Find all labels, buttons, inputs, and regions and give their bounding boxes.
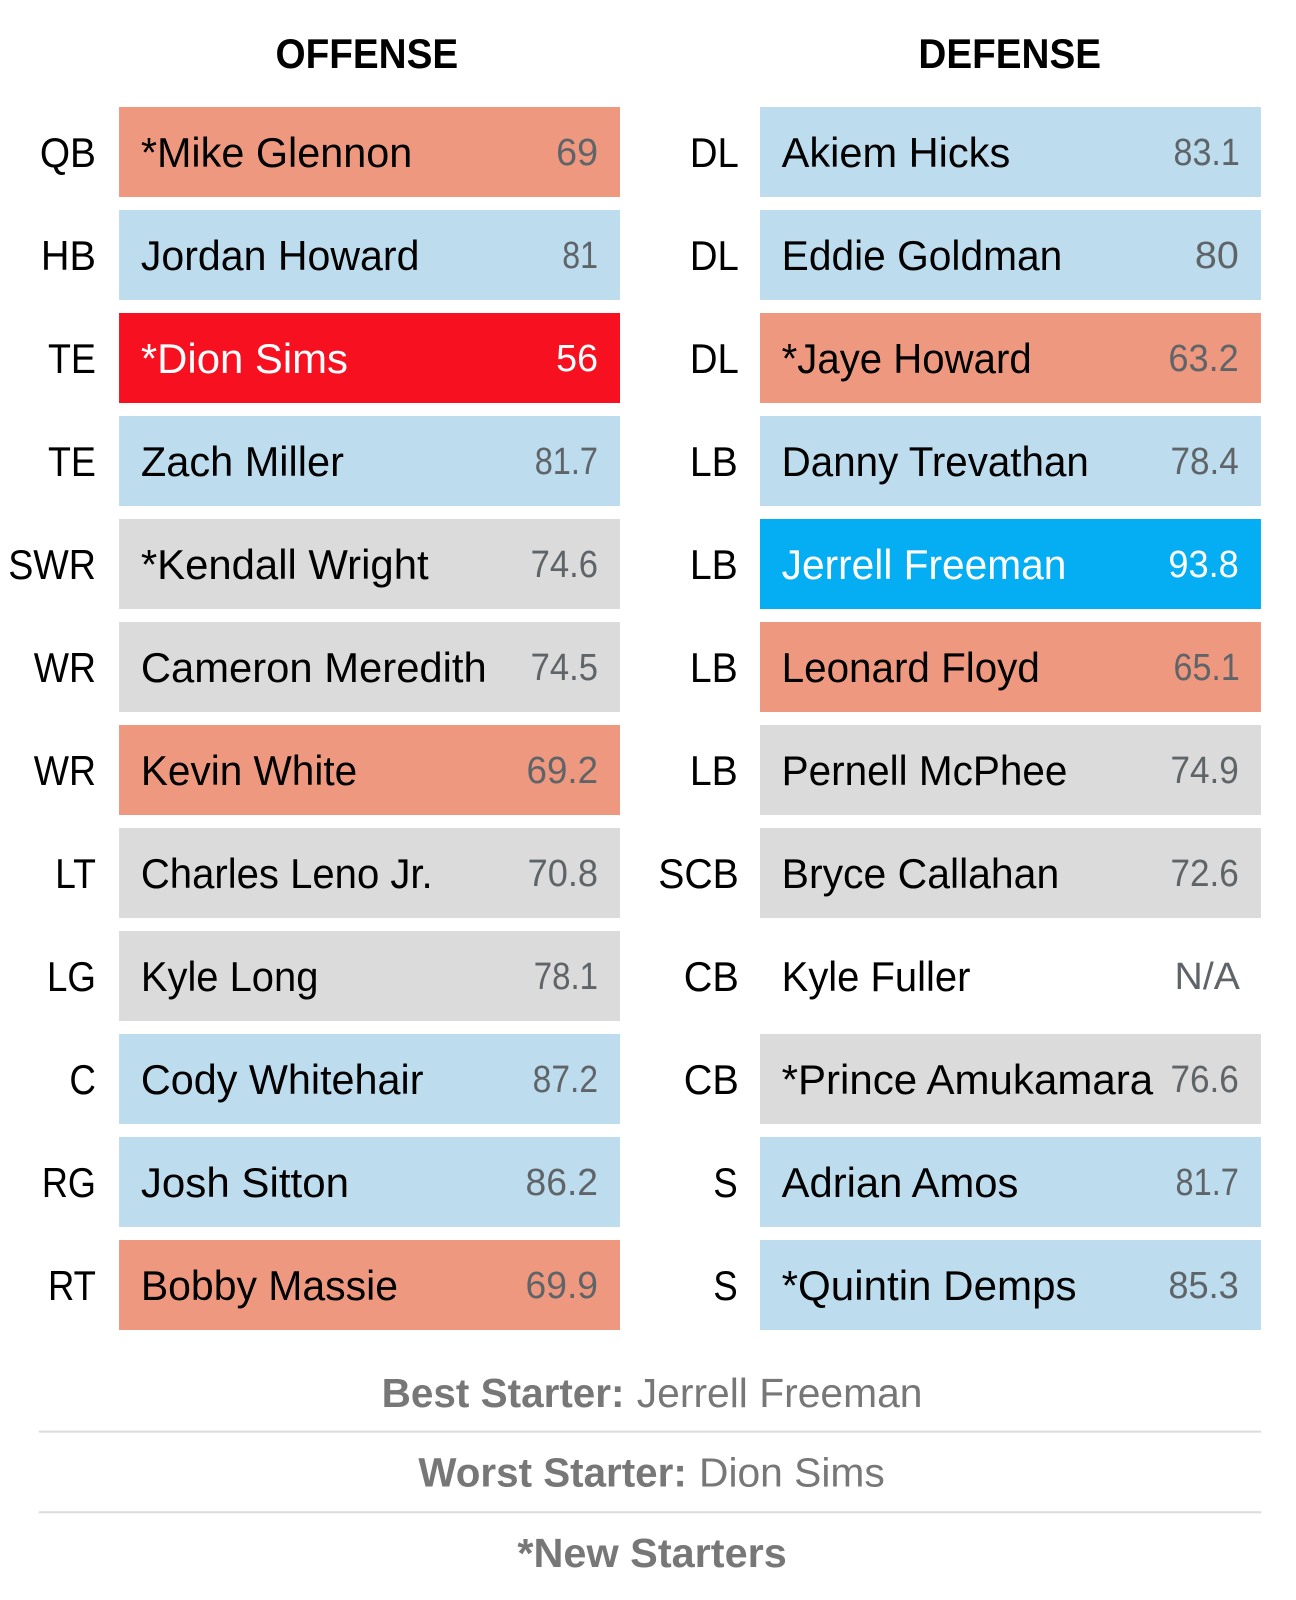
- row: TE Zach Miller: Zach Miller: [141, 438, 344, 485]
- text: best starter: Jerrell Freeman: [637, 1370, 922, 1416]
- text: worst starter: Dion Sims: [699, 1450, 885, 1496]
- row: LB Pernell McPhee: LB: [690, 747, 738, 794]
- row: LB Pernell McPhee: Pernell McPhee: [782, 747, 1067, 794]
- row: LT Charles Leno Jr.: 70.8: [528, 852, 598, 895]
- row: TE Dion Sims: TE: [48, 335, 96, 382]
- row: WR Cameron Meredith: 74.5: [531, 646, 598, 689]
- row: S Adrian Amos: S: [713, 1159, 738, 1206]
- row: LB Leonard Floyd: [690, 622, 1261, 712]
- row: DL Akiem Hicks: DL: [690, 129, 739, 176]
- row: WR Cameron Meredith: WR: [34, 644, 96, 691]
- row: LT Charles Leno Jr.: LT: [55, 850, 96, 897]
- row: HB Jordan Howard: Jordan Howard: [141, 232, 419, 279]
- row: TE Dion Sims: *Dion Sims: [141, 335, 348, 382]
- row: HB Jordan Howard: [41, 210, 620, 300]
- row: LG Kyle Long: 78.1: [534, 955, 598, 998]
- row: LG Kyle Long: [47, 931, 620, 1021]
- row: LB Jerrell Freeman: 93.8: [1168, 543, 1239, 586]
- row: CB Kyle Fuller: CB: [684, 953, 739, 1000]
- row: TE Dion Sims: 56: [556, 337, 598, 380]
- row: SCB Bryce Callahan: Bryce Callahan: [782, 850, 1059, 897]
- row: WR Kevin White: Kevin White: [141, 747, 357, 794]
- row: DL Jaye Howard: *Jaye Howard: [782, 335, 1032, 382]
- row: SWR Kendall Wright: SWR: [8, 541, 96, 588]
- row: S Adrian Amos: 81.7: [1176, 1161, 1239, 1204]
- row: RT Bobby Massie: RT: [48, 1262, 96, 1309]
- row: C Cody Whitehair: Cody Whitehair: [141, 1056, 424, 1103]
- row: DL Eddie Goldman: [690, 210, 1261, 300]
- row: DL Eddie Goldman: Eddie Goldman: [782, 232, 1062, 279]
- row: RG Josh Sitton: RG: [42, 1159, 96, 1206]
- row: RT Bobby Massie: [48, 1240, 620, 1330]
- row: SWR Kendall Wright: *Kendall Wright: [141, 541, 429, 588]
- row: LB Jerrell Freeman: Jerrell Freeman: [782, 541, 1066, 588]
- row: SCB Bryce Callahan: 72.6: [1170, 852, 1239, 895]
- text: best starter: [382, 1370, 922, 1416]
- row: DL Eddie Goldman: 80: [1195, 234, 1239, 277]
- row: DL Akiem Hicks: 83.1: [1174, 131, 1240, 174]
- row: DL Akiem Hicks: [690, 107, 1261, 197]
- row: SCB Bryce Callahan: [658, 828, 1261, 918]
- row: QB Mike Glennon: 69: [556, 131, 598, 174]
- row: S Quintin Demps: 85.3: [1168, 1264, 1239, 1307]
- row: LG Kyle Long: Kyle Long: [141, 953, 318, 1000]
- row: CB Prince Amukamara: *Prince Amukamara: [782, 1056, 1154, 1103]
- row: C Cody Whitehair: 87.2: [533, 1058, 598, 1101]
- row: CB Kyle Fuller: Kyle Fuller: [782, 953, 971, 1000]
- row: CB Kyle Fuller: [684, 953, 1240, 1000]
- row: LB Leonard Floyd: 65.1: [1174, 646, 1240, 689]
- row: QB Mike Glennon: *Mike Glennon: [141, 129, 412, 176]
- row: CB Prince Amukamara: 76.6: [1170, 1058, 1239, 1101]
- row: LB Leonard Floyd: LB: [690, 644, 738, 691]
- row: CB Kyle Fuller: N/A: [1175, 955, 1240, 998]
- row: RT Bobby Massie: 69.9: [526, 1264, 598, 1307]
- row: WR Kevin White: [34, 725, 620, 815]
- row: LB Danny Trevathan: Danny Trevathan: [782, 438, 1089, 485]
- row: CB Prince Amukamara: CB: [684, 1056, 739, 1103]
- row: RG Josh Sitton: Josh Sitton: [141, 1159, 349, 1206]
- panel: defense roster: [658, 107, 1261, 1330]
- row: LB Jerrell Freeman: [690, 519, 1261, 609]
- row: RG Josh Sitton: [42, 1137, 620, 1227]
- row: C Cody Whitehair: C: [69, 1056, 96, 1103]
- row: SWR Kendall Wright: 74.6: [531, 543, 598, 586]
- row: S Adrian Amos: Adrian Amos: [782, 1159, 1018, 1206]
- row: SCB Bryce Callahan: SCB: [658, 850, 739, 897]
- row: LB Danny Trevathan: LB: [690, 438, 738, 485]
- row: QB Mike Glennon: QB: [40, 129, 96, 176]
- row: LB Danny Trevathan: 78.4: [1170, 440, 1239, 483]
- row: LT Charles Leno Jr.: [55, 828, 620, 918]
- row: LB Pernell McPhee: [690, 725, 1261, 815]
- row: HB Jordan Howard: 81: [562, 234, 598, 277]
- row: SWR Kendall Wright: [8, 519, 620, 609]
- row: QB Mike Glennon: [40, 107, 620, 197]
- row: TE Dion Sims: [48, 313, 620, 403]
- row: DL Jaye Howard: [690, 313, 1261, 403]
- panel: offense roster: [8, 107, 620, 1330]
- heading: offense: OFFENSE: [276, 30, 458, 77]
- heading: defense: DEFENSE: [918, 30, 1101, 77]
- text: worst starter: [418, 1450, 885, 1496]
- row: RG Josh Sitton: 86.2: [526, 1161, 598, 1204]
- row: DL Eddie Goldman: DL: [690, 232, 739, 279]
- row: LB Leonard Floyd: Leonard Floyd: [782, 644, 1040, 691]
- row: WR Cameron Meredith: Cameron Meredith: [141, 644, 487, 691]
- row: DL Jaye Howard: 63.2: [1168, 337, 1239, 380]
- row: LG Kyle Long: LG: [47, 953, 96, 1000]
- row: S Quintin Demps: S: [713, 1262, 738, 1309]
- row: S Adrian Amos: [713, 1137, 1261, 1227]
- row: RT Bobby Massie: Bobby Massie: [141, 1262, 398, 1309]
- row: LB Pernell McPhee: 74.9: [1170, 749, 1239, 792]
- text: worst starter: Worst Starter:: [418, 1450, 687, 1496]
- row: CB Prince Amukamara: [684, 1034, 1261, 1124]
- row: DL Akiem Hicks: Akiem Hicks: [782, 129, 1010, 176]
- text: new starters note: *New Starters: [517, 1530, 787, 1576]
- row: S Quintin Demps: [713, 1240, 1261, 1330]
- row: LB Jerrell Freeman: LB: [690, 541, 738, 588]
- row: TE Zach Miller: 81.7: [535, 440, 598, 483]
- row: LB Danny Trevathan: [690, 416, 1261, 506]
- row: DL Jaye Howard: DL: [690, 335, 739, 382]
- row: LT Charles Leno Jr.: Charles Leno Jr.: [141, 850, 433, 897]
- row: C Cody Whitehair: [69, 1034, 620, 1124]
- row: TE Zach Miller: TE: [48, 438, 96, 485]
- row: S Quintin Demps: *Quintin Demps: [782, 1262, 1077, 1309]
- row: HB Jordan Howard: HB: [41, 232, 96, 279]
- row: WR Kevin White: 69.2: [527, 749, 598, 792]
- row: WR Cameron Meredith: [34, 622, 620, 712]
- row: WR Kevin White: WR: [34, 747, 96, 794]
- text: best starter: Best Starter:: [382, 1370, 625, 1416]
- row: TE Zach Miller: [48, 416, 620, 506]
